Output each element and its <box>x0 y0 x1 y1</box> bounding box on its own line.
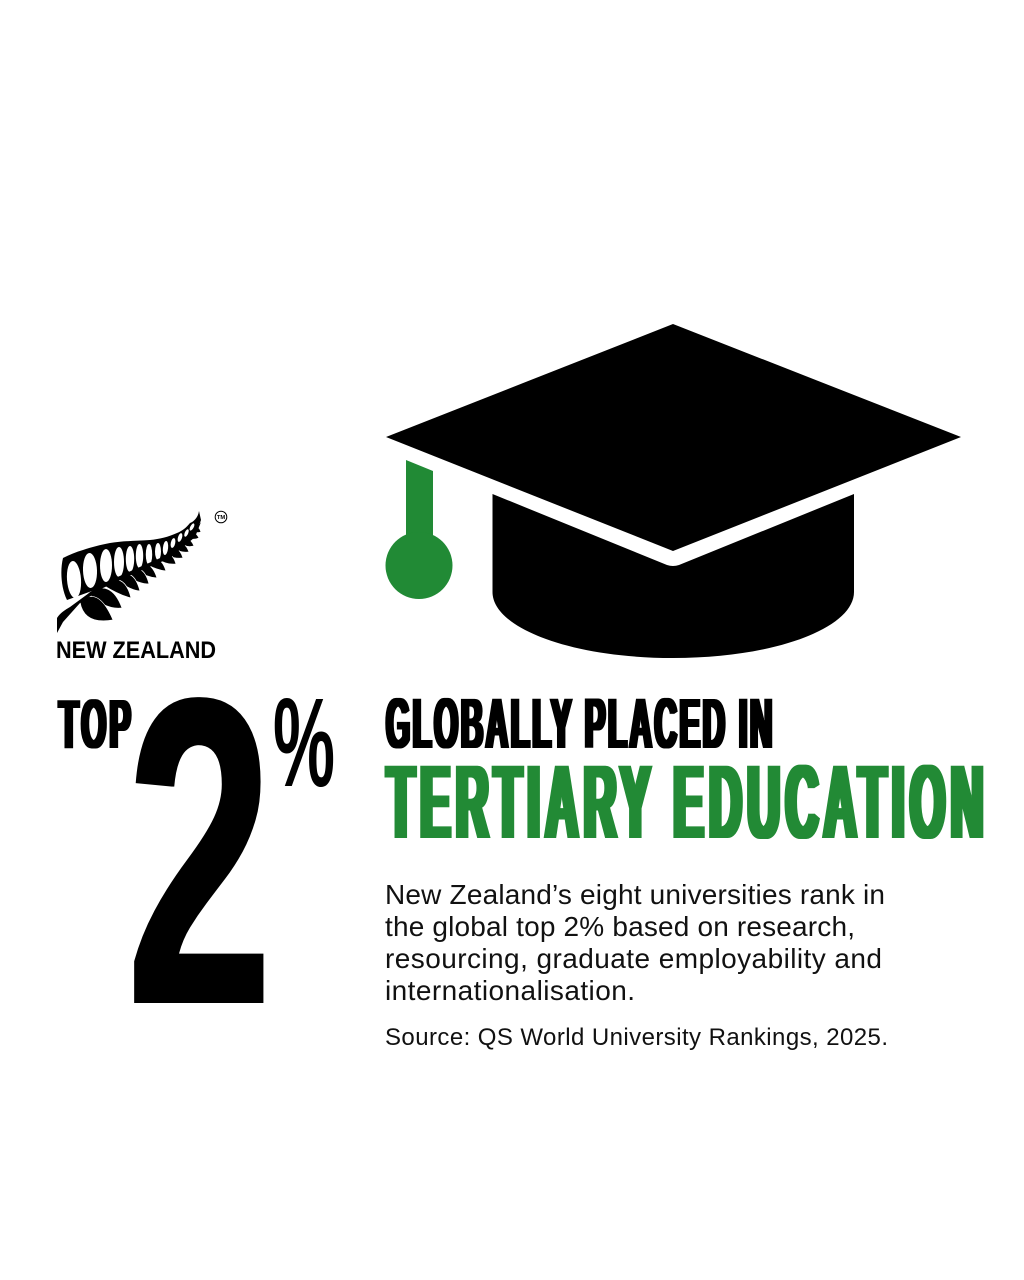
percent sign: % <box>273 672 335 813</box>
fern white gaps <box>66 523 195 598</box>
body text: resourcing, graduate employability and <box>385 943 882 974</box>
cap base <box>492 494 854 658</box>
big number 2: 2 <box>126 606 273 1096</box>
statistic: top 2%: TOP <box>59 685 134 763</box>
body text <box>385 879 885 1006</box>
statistic: top 2% <box>59 606 335 1096</box>
icon: graduation cap <box>386 324 961 658</box>
logo: New Zealand silver fern <box>56 511 227 664</box>
trademark mark: TM <box>217 515 225 521</box>
cap tassel <box>386 460 452 599</box>
trademark mark <box>215 511 227 523</box>
logo wordmark: NEW ZEALAND <box>56 637 216 664</box>
fern lower leaves <box>80 527 201 621</box>
body text: internationalisation. <box>385 975 635 1006</box>
fern stem <box>57 522 201 633</box>
body text: New Zealand’s eight universities rank in <box>385 879 885 910</box>
cap board <box>386 324 961 551</box>
fern upper pinnae band <box>61 511 201 600</box>
source note: Source: QS World University Rankings, 2025. <box>385 1024 888 1051</box>
body text: the global top 2% based on research, <box>385 911 855 942</box>
